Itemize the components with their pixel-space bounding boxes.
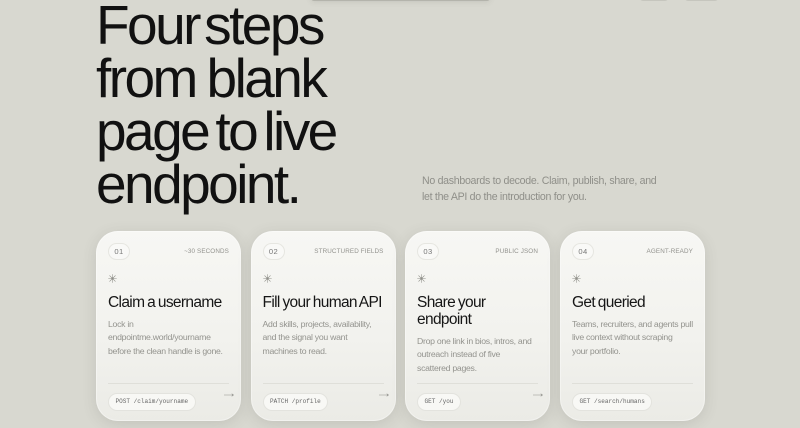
endpoint pill: GET /search/humans xyxy=(580,398,645,405)
step description: machines to read. xyxy=(262,346,327,356)
step number xyxy=(572,243,594,260)
step description xyxy=(108,319,223,356)
step number: 03 xyxy=(423,247,433,256)
step description: before the clean handle is gone. xyxy=(108,346,223,356)
endpoint pill xyxy=(572,393,652,411)
panel: step 02 xyxy=(250,231,396,421)
endpoint pill xyxy=(417,393,461,411)
panel: step 01 xyxy=(96,231,241,421)
step description: Add skills, projects, availability, xyxy=(262,319,371,329)
top edge: cropped button left xyxy=(640,0,668,1)
title xyxy=(96,0,336,215)
step description xyxy=(262,319,371,356)
top edge: cropped button right xyxy=(685,0,718,1)
tag: AGENT-READY xyxy=(647,248,693,255)
endpoint pill xyxy=(262,393,328,411)
step title xyxy=(417,294,486,328)
endpoint pill xyxy=(108,393,196,411)
step description: Drop one link in bios, intros, and xyxy=(417,336,532,346)
step number xyxy=(417,243,439,260)
arrow xyxy=(533,394,543,396)
arrow xyxy=(379,394,389,396)
endpoint pill: GET /you xyxy=(424,398,454,405)
intro text: let the API do the introduction for you. xyxy=(422,191,587,203)
step description: your portfolio. xyxy=(572,346,620,356)
step number: 01 xyxy=(114,247,124,256)
endpoint pill: PATCH /profile xyxy=(270,398,321,405)
tag: STRUCTURED FIELDS xyxy=(314,248,384,255)
panel: step 03 xyxy=(405,231,550,421)
step title: Fill your human API xyxy=(262,294,382,311)
step description: outreach instead of five xyxy=(417,349,500,359)
panel: step 04 xyxy=(560,231,705,421)
step title: Share your xyxy=(417,294,485,311)
endpoint pill: POST /claim/yourname xyxy=(116,398,188,405)
step number: 02 xyxy=(269,247,278,256)
step description xyxy=(572,319,693,356)
intro text xyxy=(422,175,656,203)
icon: asterisk xyxy=(572,274,581,283)
step description: Teams, recruiters, and agents pull xyxy=(572,319,693,329)
step number: 04 xyxy=(578,247,588,256)
icon: asterisk xyxy=(417,274,426,283)
step title: endpoint xyxy=(417,311,471,328)
step description: endpointme.world/yourname xyxy=(108,332,211,342)
title: page to live xyxy=(96,100,336,162)
top edge: cropped panel xyxy=(311,0,490,1)
step title: Get queried xyxy=(572,294,645,311)
tag: PUBLIC JSON xyxy=(495,248,538,255)
title: endpoint. xyxy=(96,153,299,215)
icon: asterisk xyxy=(108,274,117,283)
step title: Claim a username xyxy=(108,294,222,311)
step description xyxy=(417,336,532,373)
title: from blank xyxy=(96,47,325,109)
step description: live context without scraping xyxy=(572,332,673,342)
step description: and the signal you want xyxy=(262,332,347,342)
arrow xyxy=(224,394,234,396)
step description: Lock in xyxy=(108,319,134,329)
step number xyxy=(108,243,130,260)
step description: scattered pages. xyxy=(417,363,477,373)
intro text: No dashboards to decode. Claim, publish, share, and xyxy=(422,175,656,187)
icon: asterisk xyxy=(263,274,272,283)
step number xyxy=(262,243,284,260)
tag: ~30 SECONDS xyxy=(184,248,229,255)
